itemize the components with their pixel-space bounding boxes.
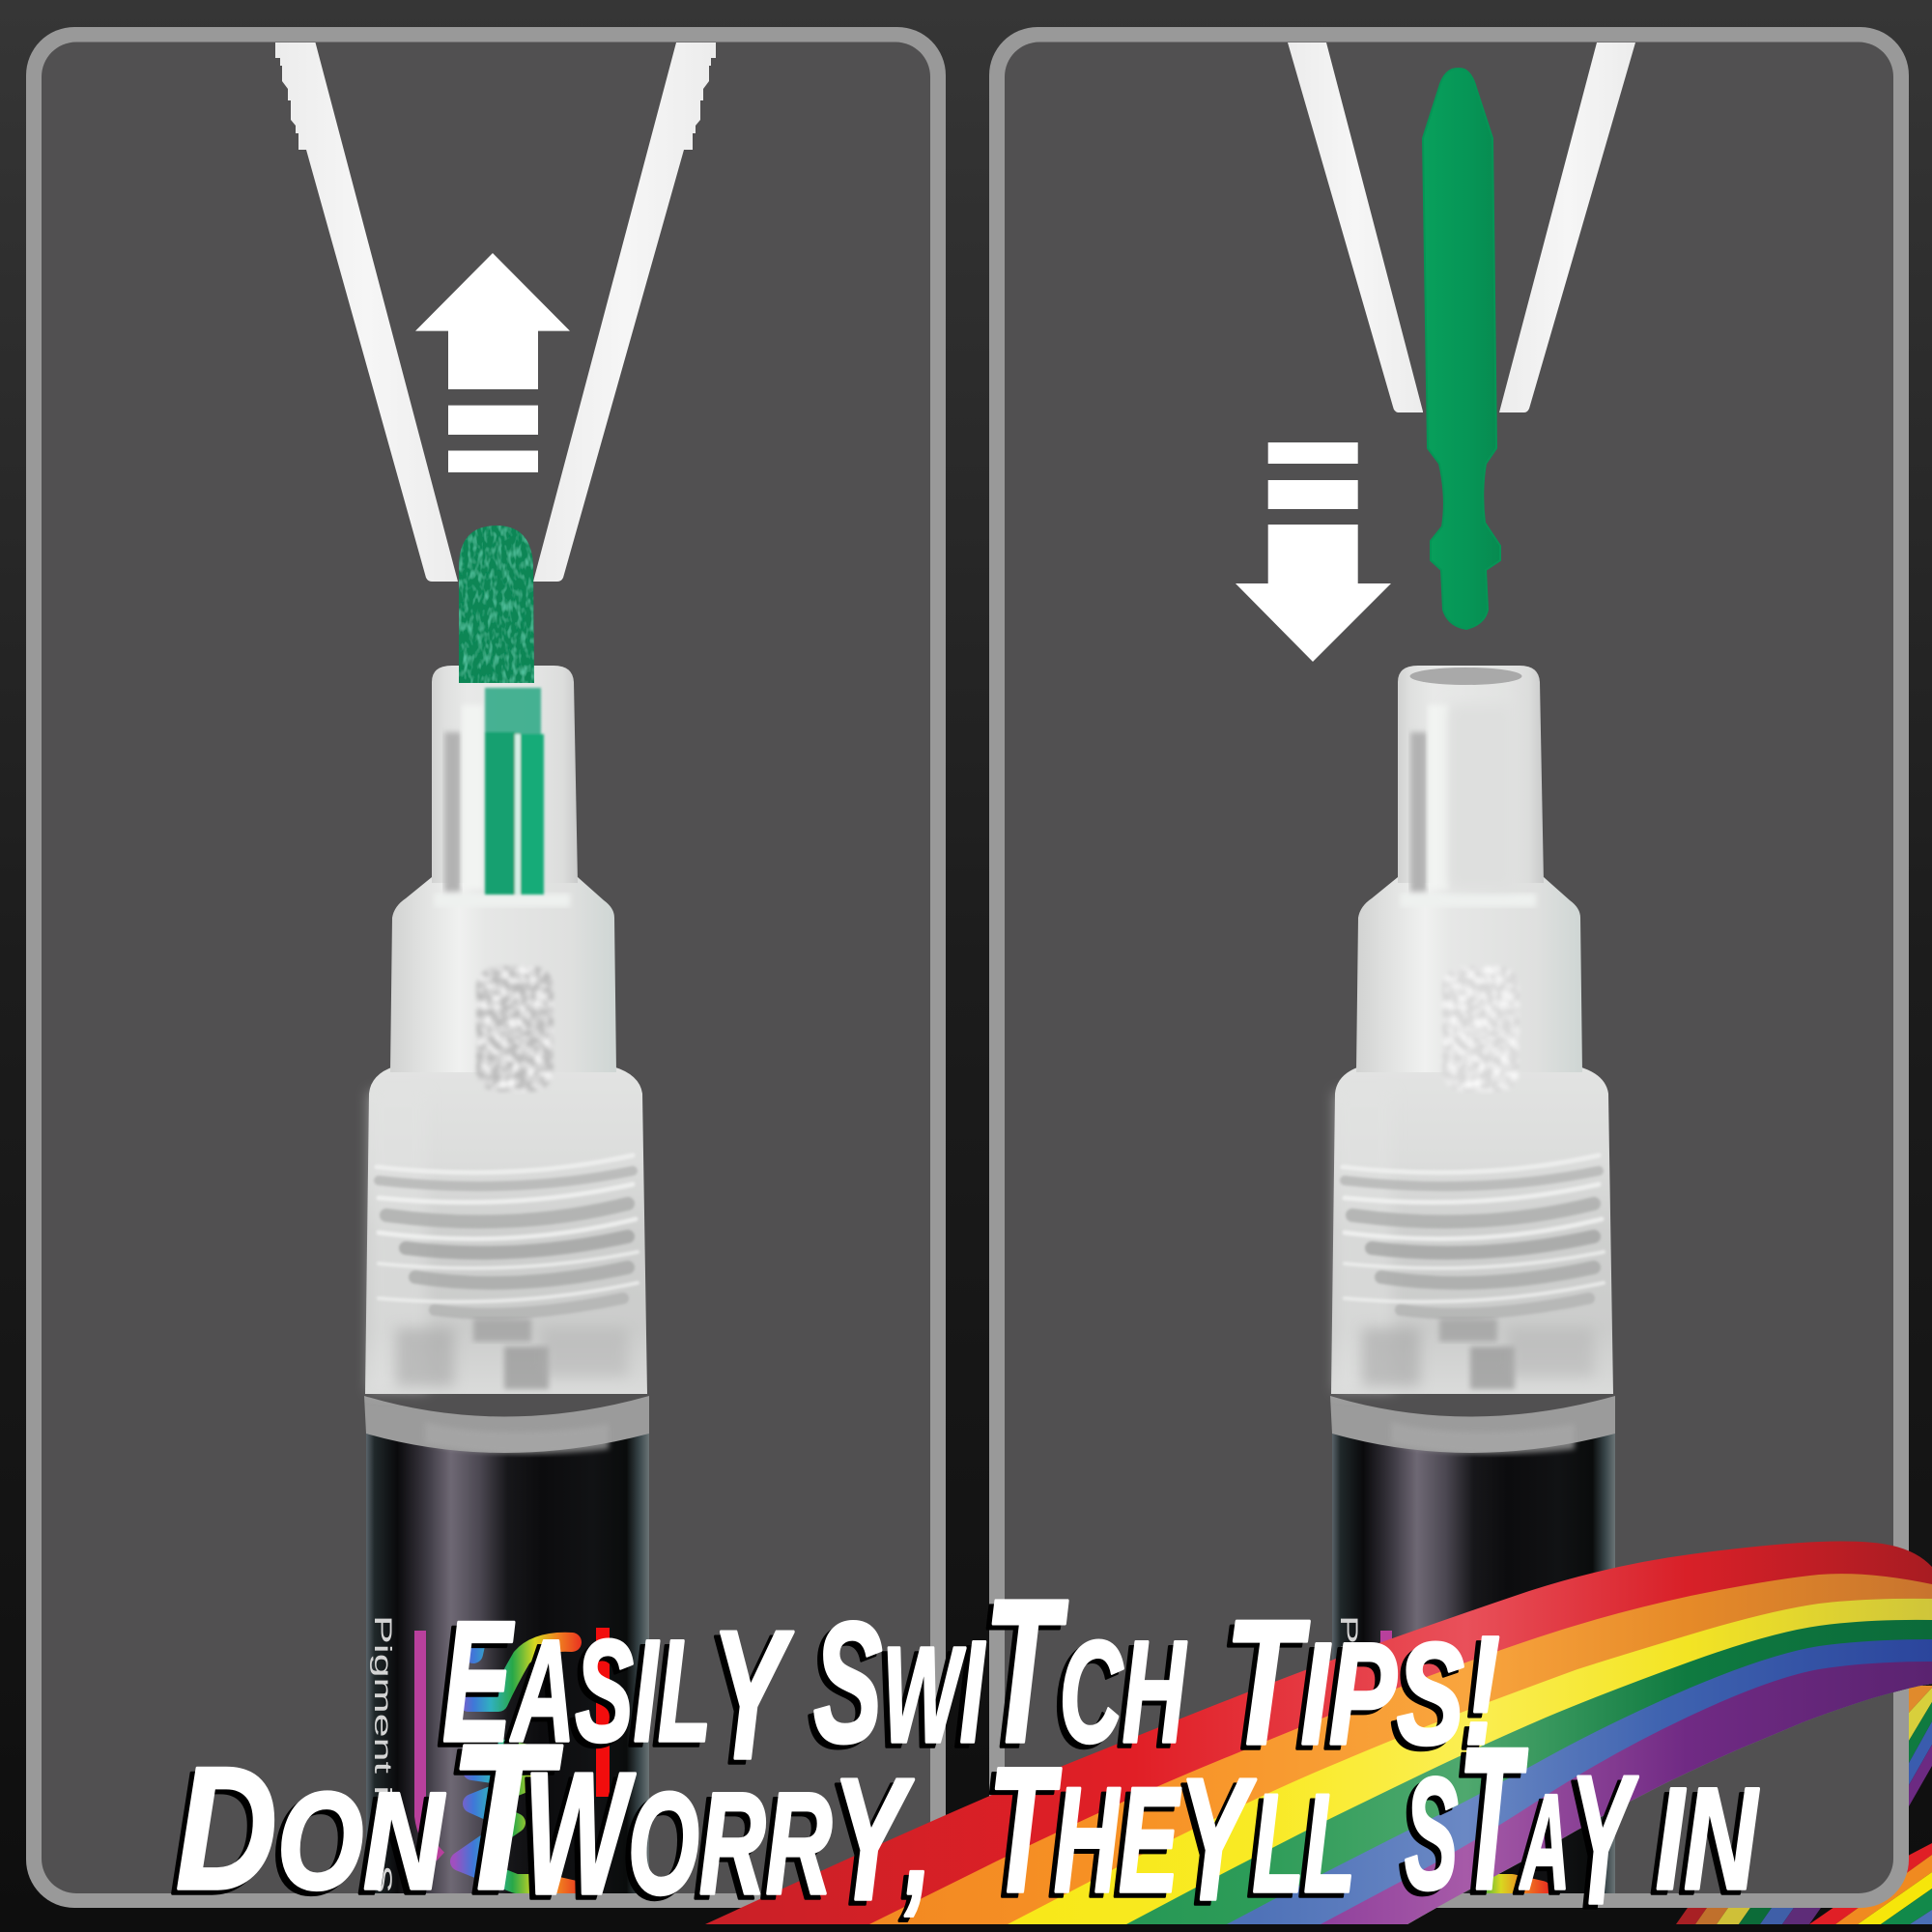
title line 2: ' [1248,1866,1253,1898]
barrel label text: Pigment ink. S [369,1615,396,1893]
green nib rod inside nozzle [485,688,544,895]
title [176,1556,1759,1932]
nozzle inner sleeve [1449,705,1513,889]
barrel rainbow logo [1426,1642,1542,1890]
barrel label text: Pigment ink. S [1335,1615,1362,1893]
marker barrel [1332,1420,1615,1903]
threaded section [365,1066,647,1394]
marker without tip [1330,666,1615,1903]
rainbow ribbon [705,1542,1932,1924]
title line 2: STA [1405,1705,1618,1932]
foam filling [1442,966,1520,1092]
collar [1356,877,1582,1072]
title line 2: Y [832,1743,914,1932]
title line 2: THE [988,1731,1262,1930]
panel frame left [26,27,946,1908]
panel: step 2 insert the tip [989,27,1909,1908]
nozzle [432,666,578,892]
marker barrel [366,1420,649,1903]
arrow: up [415,253,570,472]
foam filling [476,966,554,1092]
title line 2: WORR [524,1737,950,1931]
collar [390,877,616,1072]
green felt tip [459,526,534,683]
panel background left [42,43,930,1893]
silver ring [1330,1396,1615,1454]
arrow: down [1236,442,1391,662]
green replacement nib [1423,69,1500,629]
panel frame right [989,27,1909,1908]
panel background right [1005,43,1893,1893]
barrel red stripe [596,1628,610,1797]
title line 1: EASIL [442,1585,841,1777]
threaded section [1331,1066,1613,1394]
title line 2 [176,1700,1759,1932]
ribbon back: right edge stripes [1909,1686,1932,1806]
title line 2: , [904,1762,931,1924]
title line 1: TIPS! [1225,1582,1500,1781]
barrel pink stripe [420,1631,440,1857]
tweezers left [275,43,716,582]
barrel rainbow logo [460,1642,576,1890]
panel: step 1 remove the tip [26,27,946,1908]
title line 1: Y [711,1593,794,1798]
ribbon back: bottom stripes [1676,1905,1823,1924]
ribbon back: lower right corner stripes [1809,1843,1932,1924]
nozzle opening [1410,668,1522,685]
title line 1: SWITCH [813,1556,1187,1785]
marker with tip inserted [364,526,649,1903]
tweezers right [1288,43,1635,412]
title line 2: DON'T [176,1700,563,1932]
title line 2: Y [1179,1743,1257,1932]
barrel pink stripe [1380,1631,1392,1642]
title line 1 [442,1556,1500,1798]
nozzle [1398,666,1544,892]
title line 2: IN [1656,1757,1759,1919]
title line 2: LL [1253,1765,1355,1921]
silver ring [364,1396,649,1454]
